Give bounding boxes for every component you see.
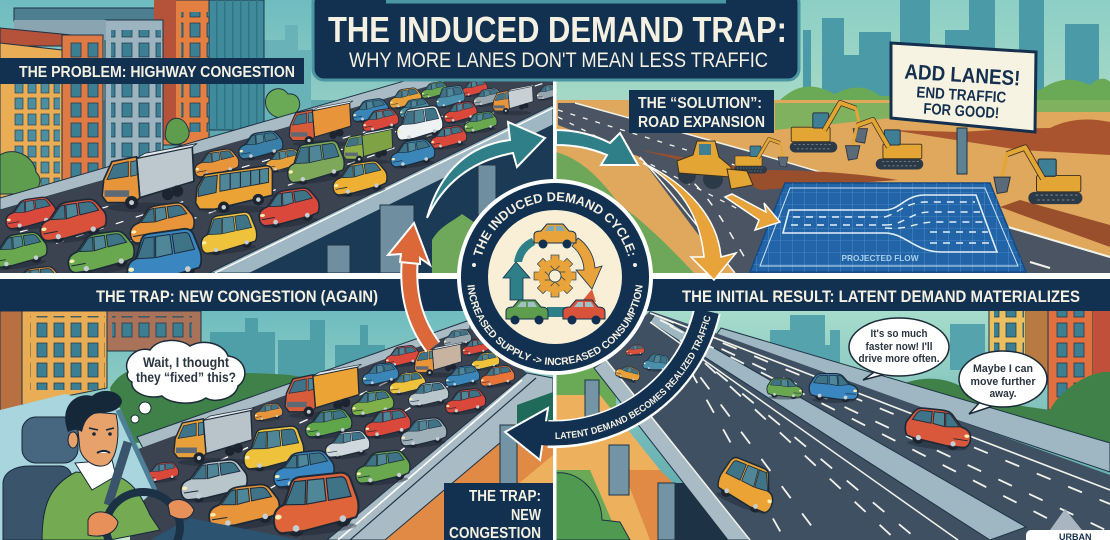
icon: orange car (534, 224, 576, 248)
label: the trap new congestion: THE TRAP: (469, 488, 541, 505)
speech bubble: drive more often: It's so much (870, 328, 928, 340)
title panel (313, 0, 799, 80)
icon: bulldozer (677, 141, 753, 189)
right caption band: initial result (640, 279, 1110, 311)
car: green (767, 378, 802, 400)
label: the solution: THE “SOLUTION”: (638, 95, 762, 112)
subtitle: WHY MORE LANES DON'T MEAN LESS TRAFFIC (349, 49, 768, 72)
left caption band: new congestion again: THE TRAP: NEW CONGESTION (AGAIN) (96, 287, 378, 306)
arrow: teal, problem to solution (427, 122, 545, 218)
central cycle badge (457, 179, 653, 375)
arrow: orange, solution to result (643, 163, 736, 280)
buildings (989, 300, 1110, 410)
speech bubble: move further away: Maybe I can (973, 363, 1033, 375)
car: yellow (716, 456, 774, 514)
billboard: FOR GOOD! (923, 101, 1000, 122)
billboard: END TRAFFIC (916, 84, 1007, 107)
speech bubble: drive more often: drive more often. (858, 353, 940, 365)
arrow ring band: latent demand becomes realized traffic (503, 311, 721, 462)
buildings (0, 311, 201, 418)
ground (556, 100, 1110, 273)
trees (0, 89, 300, 194)
label: the trap new congestion: NEW (511, 507, 541, 524)
car: blue (809, 374, 858, 403)
thought bubble (127, 340, 245, 423)
label: the solution (629, 90, 774, 133)
traffic jam of cars and trucks (0, 82, 553, 273)
panel: the trap, new congestion with driver (0, 311, 553, 540)
billboard: ADD LANES! (904, 60, 1021, 91)
logo corner badge (1026, 509, 1110, 540)
thought bubble: they “fixed” this? (136, 369, 236, 385)
central cycle badge: THE INDUCED DEMAND CYCLE: (473, 192, 636, 256)
driver in car (0, 391, 300, 540)
blueprint: projected flow (750, 183, 1026, 273)
icon: excavator facing left (845, 120, 923, 169)
label: the problem (0, 58, 304, 84)
hills (110, 372, 300, 443)
small cars near the ring (614, 345, 670, 385)
label: the solution: ROAD EXPANSION (638, 114, 765, 131)
speech bubble: drive more often (849, 318, 949, 380)
speech bubble: drive more often: faster now! I'll (866, 341, 932, 353)
icon: green car (506, 300, 548, 324)
car: red (904, 407, 972, 450)
label: the problem: THE PROBLEM: HIGHWAY CONGESTION (19, 64, 295, 81)
traffic jam of cars and trucks (145, 329, 516, 539)
roadside green verge (556, 146, 695, 273)
central cycle badge: INCREASED SUPPLY -> INCREASED CONSUMPTION (467, 284, 643, 366)
arrow: red orange, trap to problem (388, 223, 433, 347)
roadway (558, 103, 1110, 273)
arrow: teal, entering solution (556, 130, 638, 165)
icon: red car (563, 300, 605, 324)
highway deck (714, 328, 1110, 472)
billboard (891, 43, 1036, 174)
icon: gear (534, 255, 576, 297)
blueprint: projected flow: PROJECTED FLOW (842, 253, 919, 263)
icon: large excavator facing left (994, 148, 1082, 204)
speech bubble: move further away: away. (990, 388, 1016, 400)
arrow: small orange to blueprint (725, 194, 780, 230)
icon: small excavator (734, 139, 788, 174)
panel: the problem, highway congestion (0, 0, 553, 273)
highway deck (0, 82, 444, 210)
arrow ring band: latent demand becomes realized traffic: LATENT DEMAND BECOMES REALIZED TRAFFIC (555, 316, 710, 439)
speech bubble: move further away (959, 351, 1047, 414)
panel: the solution, road expansion (556, 0, 1110, 273)
thought bubble: Wait, I thought (143, 354, 229, 370)
label: the trap new congestion (444, 483, 553, 540)
bushes (906, 372, 1110, 442)
city buildings (0, 0, 264, 205)
heading: THE INDUCED DEMAND TRAP: (328, 9, 787, 50)
underpass and green tree (556, 366, 728, 540)
skyline (803, 0, 1099, 105)
highway deck (137, 320, 470, 450)
excavation trench (640, 150, 898, 190)
skyline (760, 315, 985, 370)
skyline (210, 318, 385, 377)
speech bubble: move further away: move further (970, 376, 1036, 388)
left caption band: new congestion again (0, 279, 480, 311)
skyline (264, 25, 311, 120)
icon: cycle arrows (503, 238, 602, 317)
panel: initial result, latent demand materializes (556, 300, 1110, 540)
hills (780, 78, 1110, 100)
icon: excavator (790, 103, 868, 152)
